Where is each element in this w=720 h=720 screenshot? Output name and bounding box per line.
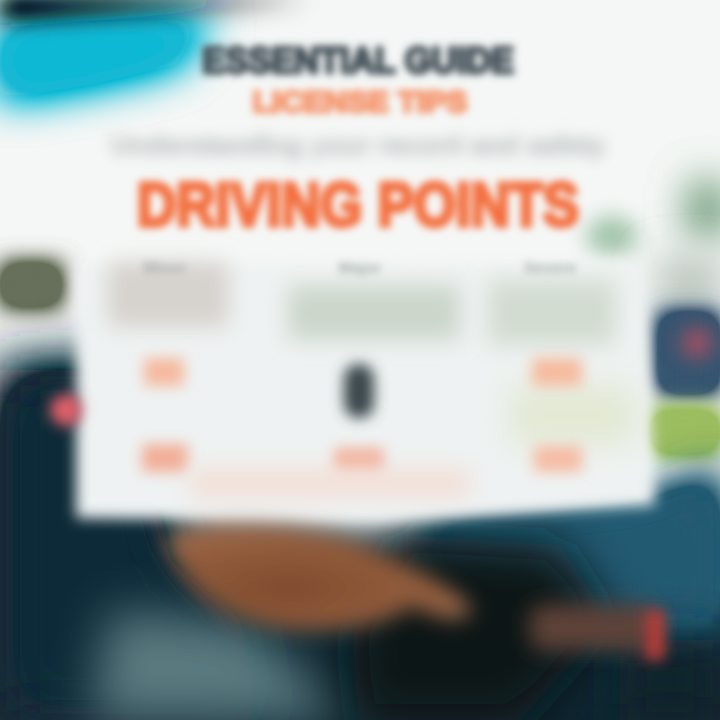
dashboard orange display: [530, 605, 655, 650]
column heading: left: Minor: [143, 260, 187, 277]
title: top line: ESSENTIAL GUIDE: [202, 40, 514, 81]
background: dark steering wheel: [350, 535, 610, 720]
background: cyan windscreen tint: [0, 18, 215, 100]
background: dashboard lower right: [620, 640, 720, 720]
background: left tree line: [0, 263, 62, 307]
icon: left orange marker: [144, 358, 184, 386]
hand pointing: [165, 525, 472, 630]
panel: left column image: [108, 262, 228, 327]
icon: car key: [344, 364, 374, 418]
dashboard red light: [645, 610, 665, 660]
panel: infographic sheet: [76, 262, 655, 522]
background: dark driver shoulder: [0, 370, 260, 720]
title: main heading: DRIVING POINTS: [137, 171, 579, 240]
panel: right column green tint: [510, 385, 635, 445]
icon: lower right orange marker: [534, 446, 582, 472]
background: red car light: [683, 329, 711, 357]
panel: middle column image: [288, 285, 460, 340]
column heading: middle: Major: [339, 260, 381, 277]
panel: right column image: [488, 280, 616, 345]
icon: lower left orange marker: [142, 444, 188, 472]
background: green tree behind panel: [586, 216, 638, 256]
background: right tree: [695, 185, 720, 235]
icon: red pin on left edge: [50, 394, 82, 426]
background: road and dashboard at right: [430, 470, 720, 630]
icon: right orange marker: [532, 358, 582, 386]
background: soft right haze: [660, 265, 720, 300]
icon: lower middle orange marker: [334, 448, 384, 474]
background: lighter sleeve: [90, 610, 350, 720]
background: lower dark base: [0, 500, 720, 720]
column heading: right: Severe: [524, 260, 576, 277]
background: dark sun visor: [0, 0, 310, 16]
title: orange subtitle: LICENSE TIPS: [252, 86, 468, 119]
background: grass: [650, 410, 720, 454]
background: blue car at right: [658, 312, 720, 394]
title: grey tagline: Understanding your record and safety: [110, 130, 606, 160]
text block: lower caption: [190, 468, 470, 498]
